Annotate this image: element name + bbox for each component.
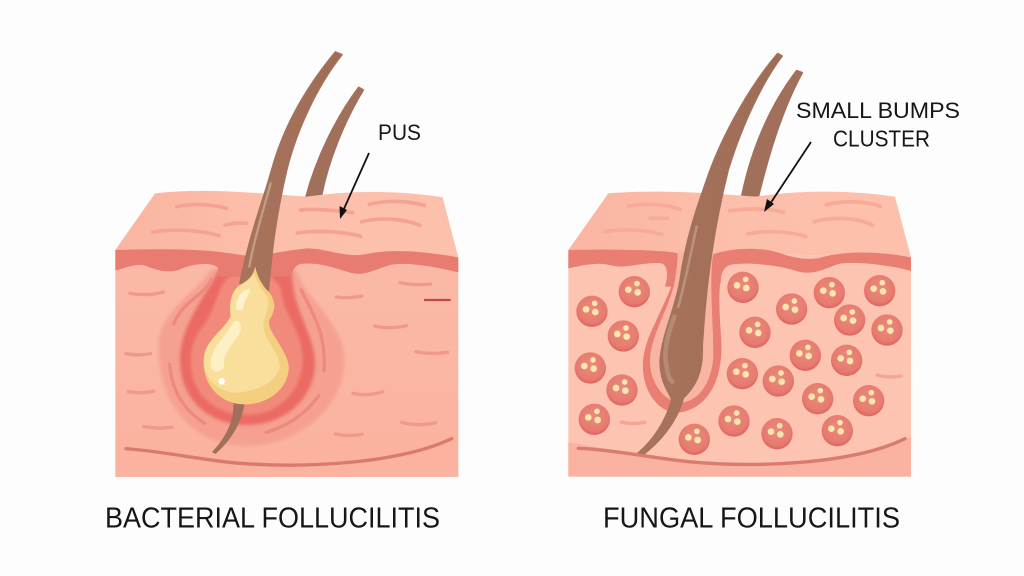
pus sac xyxy=(204,267,289,404)
skin surface creases xyxy=(153,201,424,236)
basal line xyxy=(126,439,452,465)
panel: bacterial folliculitis skin diagram xyxy=(115,52,458,477)
heading: bacterial folliculitis: BACTERIAL FOLLUCILITIS xyxy=(105,502,440,534)
dermis creases xyxy=(621,375,901,424)
heading: fungal folliculitis: FUNGAL FOLLUCILITIS xyxy=(603,502,900,534)
lower dermis strip xyxy=(568,437,911,477)
bump cluster xyxy=(575,272,903,455)
basal line xyxy=(578,439,905,464)
hair highlight xyxy=(678,227,697,307)
skin top surface xyxy=(115,191,458,257)
inner lighter ring xyxy=(191,273,303,415)
hair bulb highlight xyxy=(665,317,674,382)
dermal band xyxy=(115,248,458,277)
arrow: small bumps xyxy=(764,142,811,212)
dermis creases xyxy=(126,283,448,436)
red mark xyxy=(424,296,451,303)
follicle inner lining xyxy=(650,252,713,403)
hair: main shaft xyxy=(240,52,342,290)
label: pus: PUS xyxy=(378,120,421,145)
dermis front face xyxy=(568,250,911,477)
skin surface creases xyxy=(605,202,880,236)
arrow: pus xyxy=(340,153,369,219)
hair highlight xyxy=(249,183,271,267)
hair root tail xyxy=(212,400,245,454)
inflammation contour lines xyxy=(170,279,324,432)
dermis front face xyxy=(115,250,458,477)
panel: fungal folliculitis skin diagram xyxy=(568,53,911,477)
red inflamed ring xyxy=(180,268,315,425)
hair: short shaft xyxy=(742,71,802,197)
follicle wall xyxy=(643,253,721,413)
hair: main shaft xyxy=(638,53,782,455)
pus highlights xyxy=(236,288,250,310)
label: small bumps cluster: CLUSTER xyxy=(833,126,930,152)
hair: short shaft xyxy=(306,87,363,197)
dermal band: right xyxy=(710,249,911,283)
skin top surface xyxy=(568,192,911,257)
dermal band: left xyxy=(568,250,677,287)
label: small bumps cluster: SMALL BUMPS xyxy=(796,98,960,123)
label: small bumps cluster xyxy=(796,98,960,152)
inflammation halo xyxy=(159,270,344,446)
